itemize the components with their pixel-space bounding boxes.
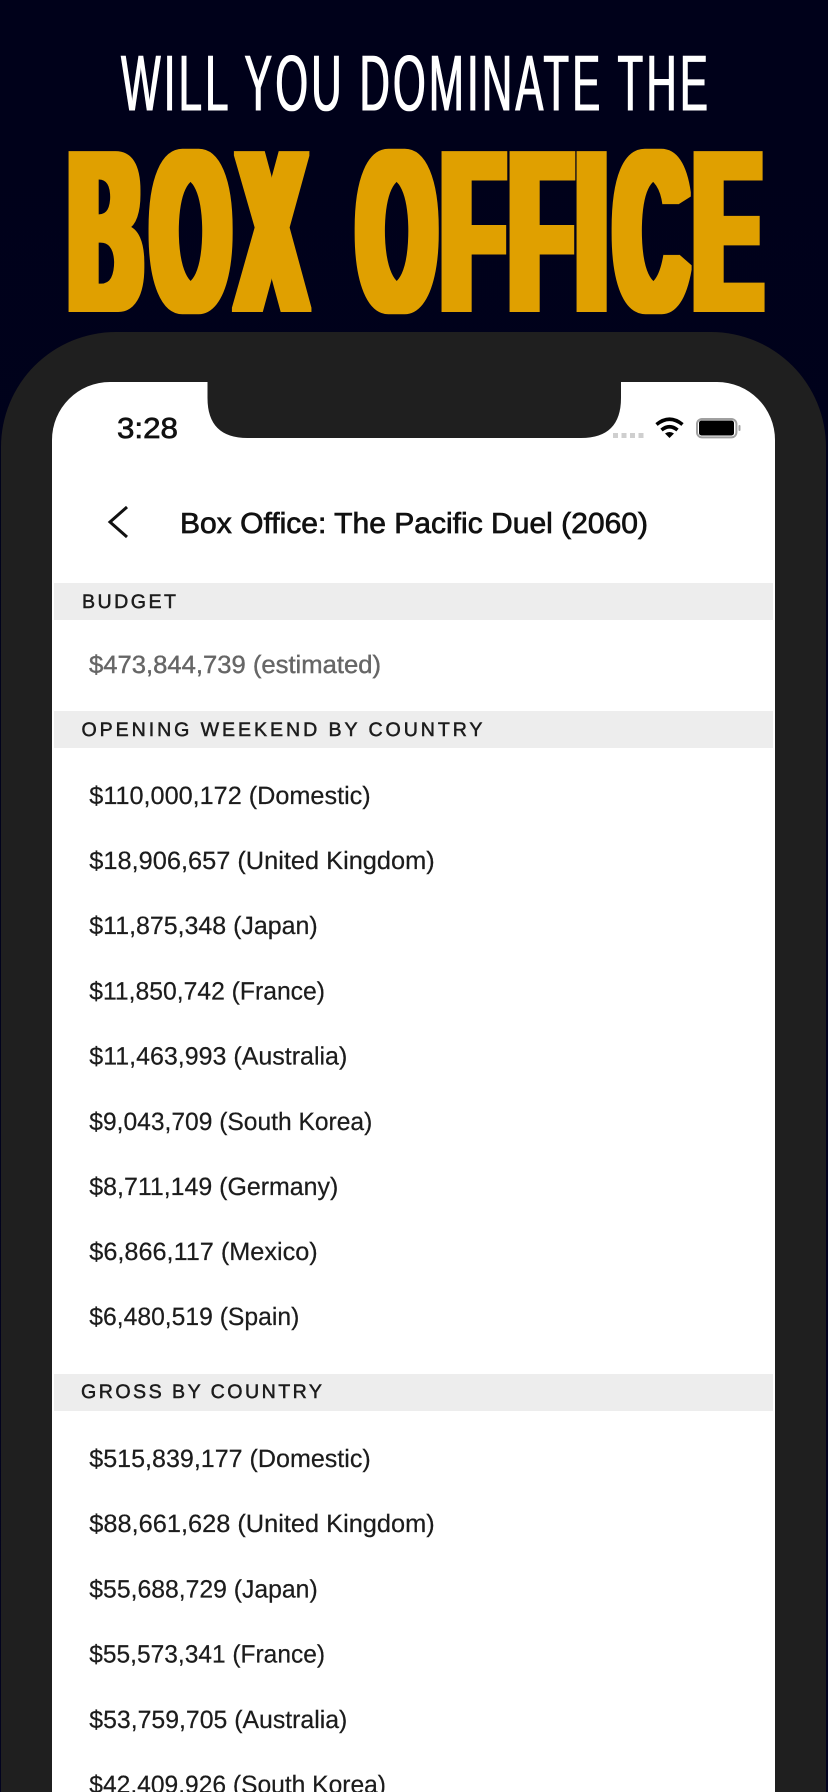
list: opening weekend by country: $6,480,519 (Spain) <box>89 1303 299 1331</box>
list: gross by country: $88,661,628 (United Kingdom) <box>89 1510 435 1538</box>
list: gross by country <box>89 1445 435 1792</box>
navigation title: Box Office: The Pacific Duel (2060) <box>180 508 648 540</box>
list: opening weekend by country: $18,906,657 (United Kingdom) <box>89 847 435 875</box>
phone screen <box>52 382 775 1792</box>
icon: signal dots <box>613 433 644 438</box>
list: opening weekend by country: $11,463,993 (Australia) <box>89 1043 347 1071</box>
section header: gross by country <box>54 1374 773 1411</box>
list: gross by country: $55,573,341 (France) <box>89 1641 325 1669</box>
section header: budget: BUDGET <box>82 591 176 613</box>
list: opening weekend by country: $8,711,149 (Germany) <box>89 1173 338 1201</box>
heading: box office: BOX OFFICE <box>70 105 760 359</box>
section header: budget <box>54 583 773 620</box>
icon: wifi <box>656 419 682 438</box>
list: opening weekend by country <box>89 782 435 1331</box>
list: opening weekend by country: $11,875,348 (Japan) <box>89 912 318 940</box>
list: gross by country: $53,759,705 (Australia) <box>89 1706 347 1734</box>
icon: back chevron <box>110 507 127 537</box>
list: gross by country: $515,839,177 (Domestic) <box>89 1445 371 1473</box>
list: opening weekend by country: $110,000,172 (Domestic) <box>89 782 371 810</box>
list: opening weekend by country: $11,850,742 (France) <box>89 978 325 1006</box>
list: opening weekend by country: $9,043,709 (South Korea) <box>89 1108 372 1136</box>
section header: opening weekend by country: OPENING WEEKEND BY COUNTRY <box>82 719 482 741</box>
list: opening weekend by country: $6,866,117 (Mexico) <box>89 1238 318 1266</box>
icon: battery <box>697 419 740 437</box>
list: gross by country: $55,688,729 (Japan) <box>89 1576 318 1604</box>
notch <box>208 380 621 438</box>
section header: opening weekend by country <box>54 711 773 748</box>
budget value: $473,844,739 (estimated) <box>89 651 381 679</box>
section header: gross by country: GROSS BY COUNTRY <box>81 1381 322 1403</box>
status bar time: 3:28 <box>117 413 178 445</box>
